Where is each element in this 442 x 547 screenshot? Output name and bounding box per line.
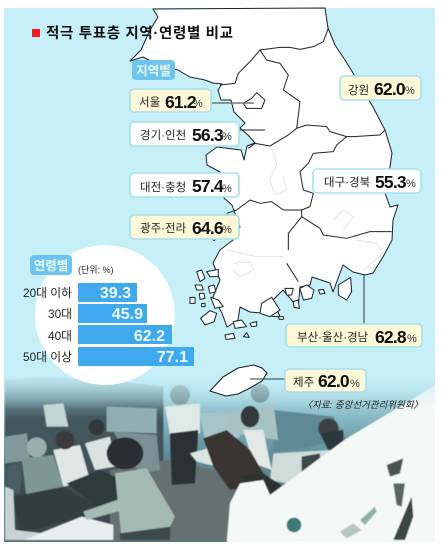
bar: 50s and over: 77.1 [157,349,188,366]
label: Gangwon [340,76,421,100]
label: Gangwon: 62.0 [374,79,406,99]
label: Gyeonggi-Incheon [130,122,239,146]
source note: 〈자료: 중앙선거관리위원회〉 [303,399,423,411]
bar: under 20s: 39.3 [100,285,131,302]
label: Gwangju-Jeolla: 광주·전라 [140,222,187,235]
bar: 30s [48,304,147,323]
label: Gwangju-Jeolla: % [222,224,232,236]
label: Jeju: 62.0 [318,371,350,391]
bar: under 20s: 20대 이하 [23,286,72,300]
regional tag: 지역별 [136,64,171,78]
label: Daegu-Gyeongbuk: % [406,178,416,190]
bar: 30s: 30대 [48,307,72,321]
age tag: 연령별 [34,259,68,273]
label: Busan-Ulsan-Gyeongnam [286,324,422,347]
connector lines [212,103,364,379]
label: Jeju: % [350,378,360,390]
label: Daegu-Gyeongbuk: 55.3 [375,172,407,192]
boundaries: provinces [220,28,392,250]
label: Daejeon-Chungcheong: 대전·충청 [140,181,186,194]
unit note: (단위: %) [78,265,114,275]
regional tag [132,60,175,80]
label: Busan-Ulsan-Gyeongnam: 부산·울산·경남 [297,330,369,344]
label: Gyeonggi-Incheon: 경기·인천 [140,128,186,142]
island: Jeju [210,365,267,396]
label: Daejeon-Chungcheong: 57.4 [192,176,224,196]
bar: 40s: 40대 [48,329,72,343]
label: Seoul: 61.2 [165,92,197,112]
label: Seoul: 서울 [139,96,160,109]
label: Daegu-Gyeongbuk [313,169,421,193]
label: Gwangju-Jeolla: 64.6 [192,218,224,238]
white circle behind age chart [35,245,175,385]
label: Seoul: % [193,98,203,110]
label: Daejeon-Chungcheong: % [222,183,232,195]
bar: 50s and over: 50대 이상 [23,350,72,364]
label: Gangwon: 강원 [348,83,369,97]
islands [190,235,352,339]
label: Daegu-Gyeongbuk: 대구·경북 [324,175,370,189]
bar: 40s: 62.2 [134,328,165,345]
label: Seoul [130,89,211,112]
label: Gangwon: % [405,85,415,97]
label: Gyeonggi-Incheon: % [222,131,232,143]
bar: under 20s [23,283,137,302]
title: 적극 투표층 지역·연령별 비교 [46,25,233,42]
bar: 50s and over [23,347,194,366]
bar: 40s [48,325,172,345]
label: Busan-Ulsan-Gyeongnam: % [407,333,417,345]
label: Jeju: 제주 [293,376,314,389]
label: Busan-Ulsan-Gyeongnam: 62.8 [375,327,407,347]
photo: voters at polling station [4,372,437,543]
bar chart by age [23,283,194,366]
age tag [30,255,72,275]
map of South Korea [130,8,398,396]
label: Jeju [285,369,366,392]
label: Daejeon-Chungcheong [130,173,239,197]
bar: 30s: 45.9 [112,306,143,323]
boundaries: south [227,240,383,282]
label: Gwangju-Jeolla [130,215,239,239]
label: Gyeonggi-Incheon: 56.3 [192,125,224,145]
